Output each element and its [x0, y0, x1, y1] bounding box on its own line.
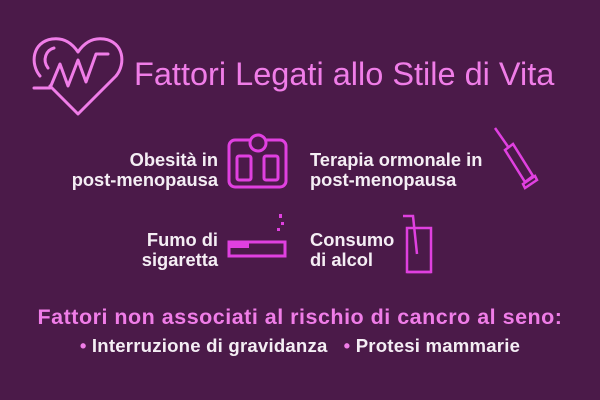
icon: scale [228, 134, 288, 188]
icon: heart with pulse [32, 37, 124, 116]
text: alcohol: di alcol [310, 249, 373, 270]
text: smoking [142, 229, 218, 270]
text: hormone therapy: Terapia ormonale in [310, 149, 482, 170]
heading: not associated factors: Fattori non associati al rischio di cancro al seno: [38, 305, 562, 329]
text: smoking: sigaretta [142, 249, 218, 270]
text: hormone therapy: post-menopausa [310, 169, 456, 190]
bullet list: • Interruzione di gravidanza • Protesi mammarie [80, 335, 520, 356]
text: alcohol [310, 229, 394, 270]
text: smoking: Fumo di [147, 229, 218, 250]
text: obesity: Obesità in [130, 149, 218, 170]
text: alcohol: Consumo [310, 229, 394, 250]
text: hormone therapy [310, 149, 482, 190]
icon: glass [403, 214, 432, 274]
icon: cigarette [228, 214, 286, 258]
text: obesity: post-menopausa [72, 169, 218, 190]
title: Fattori Legati allo Stile di Vita [134, 56, 554, 92]
icon: syringe [494, 127, 538, 190]
text: obesity [72, 149, 218, 190]
